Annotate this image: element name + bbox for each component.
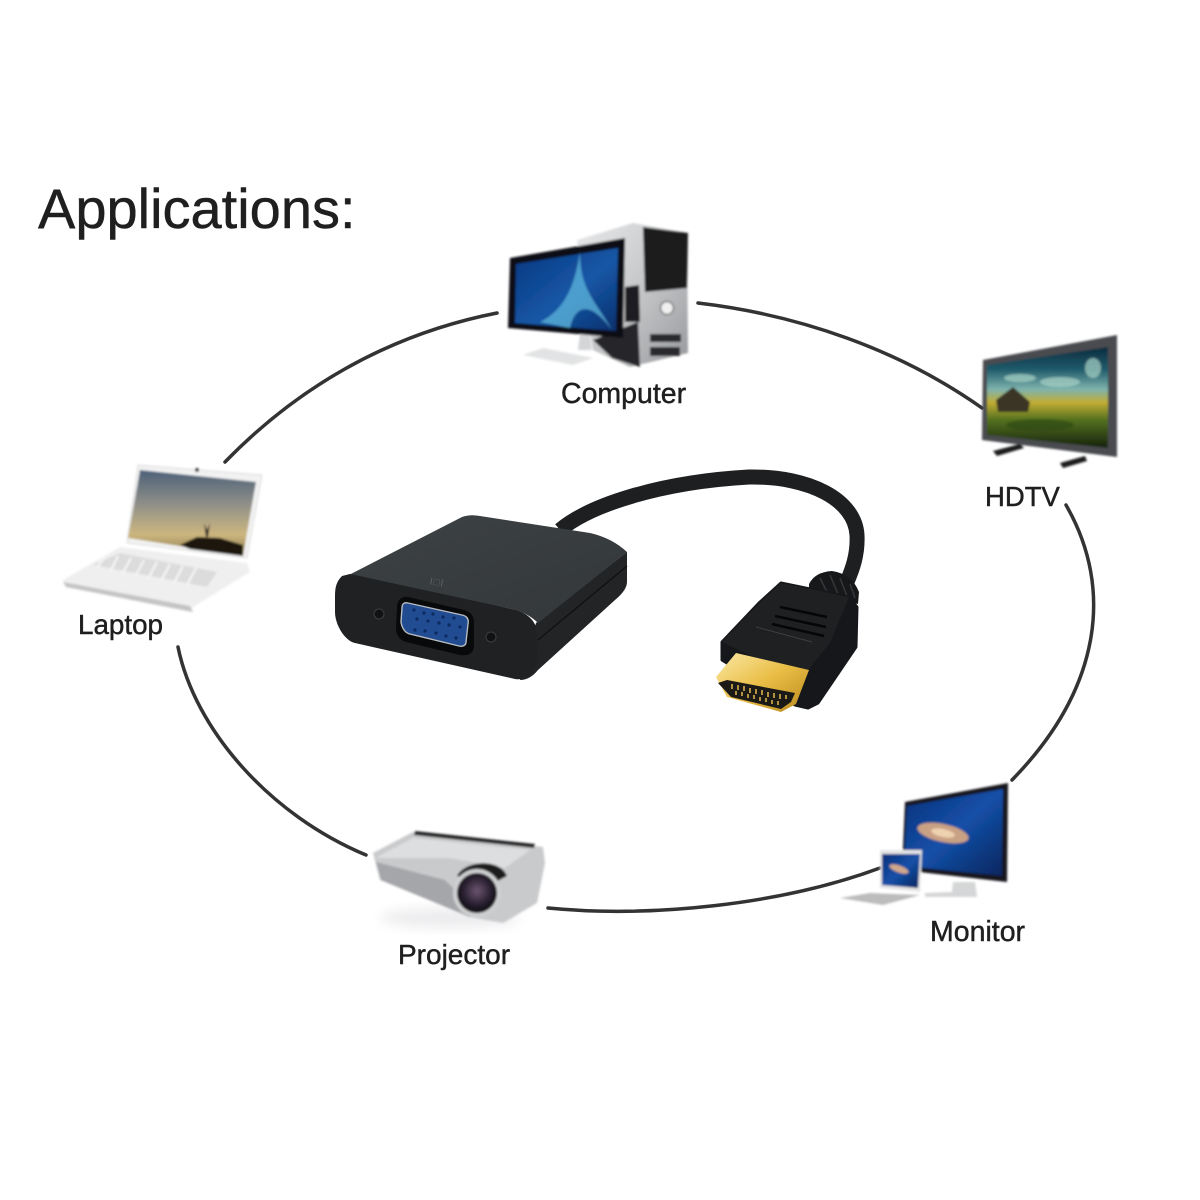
port logo: I□I xyxy=(429,576,445,590)
title: Applications: xyxy=(38,177,356,240)
label: laptop: Laptop xyxy=(78,609,163,640)
label: computer: Computer xyxy=(561,378,687,410)
HDMI connector xyxy=(716,571,859,712)
HDMI to VGA adapter xyxy=(335,477,859,712)
adapter cable xyxy=(560,477,857,582)
label: HDTV: HDTV xyxy=(985,481,1061,512)
icon: projector xyxy=(373,831,545,928)
icon: computer xyxy=(508,223,688,367)
gold plug xyxy=(716,653,809,712)
icon: HDTV xyxy=(982,335,1117,468)
connection ring xyxy=(178,303,1094,911)
screw left xyxy=(374,609,384,619)
label: monitor: Monitor xyxy=(930,916,1026,948)
VGA port xyxy=(396,597,474,655)
screw right xyxy=(486,632,496,642)
icon: laptop xyxy=(63,465,262,612)
icon: monitor xyxy=(840,783,1008,905)
adapter body xyxy=(335,515,627,680)
label: projector: Projector xyxy=(398,939,510,970)
